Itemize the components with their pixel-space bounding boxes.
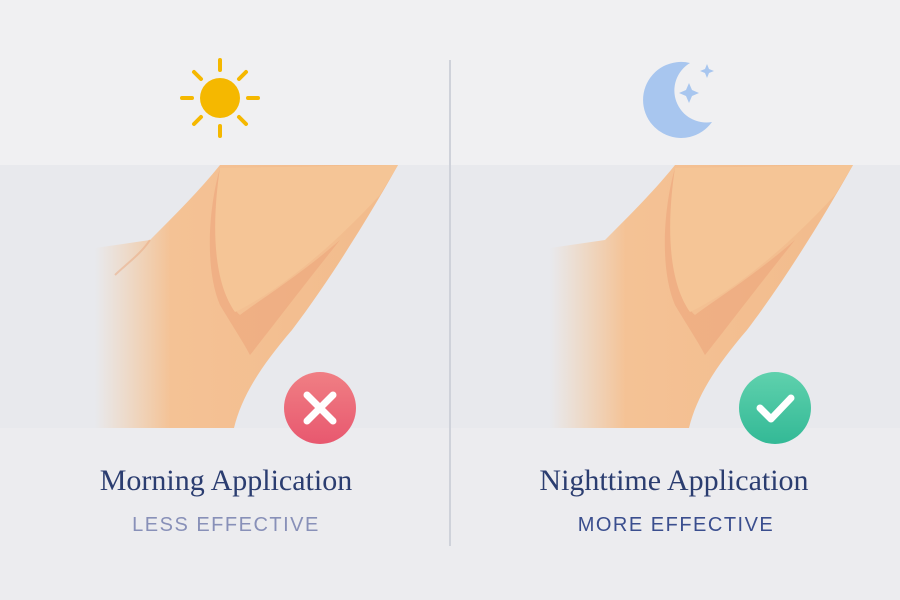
icon: green check <box>739 372 811 444</box>
label: less effective: LESS EFFECTIVE <box>132 514 320 536</box>
panel: morning <box>95 60 398 536</box>
panel: nighttime <box>539 62 853 536</box>
icon: red x <box>284 372 356 444</box>
label: more effective: MORE EFFECTIVE <box>578 514 774 536</box>
icon: sun <box>182 60 258 136</box>
illustration: underarm morning <box>95 165 398 428</box>
heading: nighttime: Nighttime Application <box>539 464 809 497</box>
heading: morning: Morning Application <box>100 464 352 497</box>
illustration: underarm night <box>550 165 853 428</box>
icon: moon <box>643 62 714 138</box>
